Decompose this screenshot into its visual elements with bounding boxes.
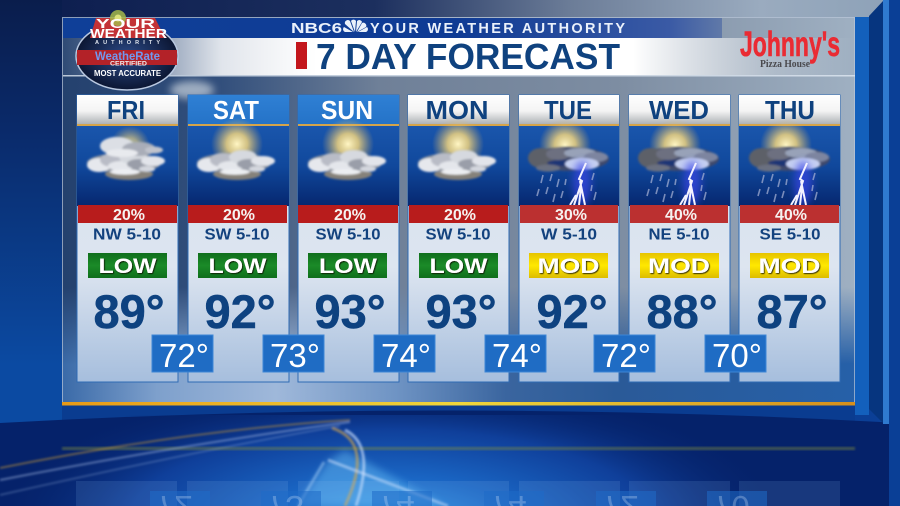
forecast card: Tuesday: W 5-10 — [541, 226, 597, 244]
low temperature: 72: 72° — [601, 337, 651, 374]
panel sky — [62, 17, 855, 403]
badge: Your Weather Authority WeatheRate — [76, 10, 178, 90]
low temperature: 74: 74° — [381, 337, 431, 374]
forecast card: Sunday: 93° — [314, 285, 386, 338]
header bar: NBC6 your weather authority: YOUR WEATHER AUTHORITY — [370, 21, 625, 37]
forecast card: Tuesday: 30% — [555, 207, 587, 224]
forecast card: Saturday: SAT — [213, 95, 259, 125]
forecast card: Monday — [408, 95, 509, 382]
forecast card: Wednesday: 40% — [665, 207, 697, 224]
badge: Your Weather Authority WeatheRate: WeatheRate — [95, 49, 160, 63]
forecast card: Wednesday — [629, 95, 730, 382]
forecast card: Tuesday: MOD — [538, 255, 600, 278]
forecast card: Monday: LOW — [430, 255, 488, 278]
forecast card: Monday: MON — [426, 95, 488, 125]
logo: Johnny's Pizza House: Johnny's — [740, 25, 840, 64]
logo: Johnny's Pizza House — [740, 25, 840, 70]
forecast card: Friday: FRI — [107, 95, 145, 125]
forecast card: Thursday: SE 5-10 — [760, 226, 820, 244]
forecast card: Friday: 89° — [93, 285, 165, 338]
forecast card: Tuesday — [519, 95, 619, 382]
gold base line — [62, 402, 855, 406]
forecast card: Sunday — [298, 95, 399, 382]
forecast card: Monday: SW 5-10 — [426, 226, 490, 244]
title: 7 DAY FORECAST — [316, 36, 620, 77]
forecast card: Saturday: 20% — [223, 207, 255, 224]
badge: Your Weather Authority WeatheRate: YOUR — [96, 16, 156, 31]
low temperature: 70: 70° — [712, 337, 762, 374]
forecast card: Tuesday: 92° — [536, 285, 608, 338]
forecast card: Saturday: 92° — [204, 285, 276, 338]
forecast card: Sunday: 20% — [334, 207, 366, 224]
logo: Johnny's Pizza House: Pizza House — [760, 59, 811, 70]
forecast card: Sunday: SUN — [321, 95, 373, 125]
low temperature: 73: 73° — [270, 337, 320, 374]
forecast card: Thursday: 87° — [756, 285, 828, 338]
forecast card: Monday: 93° — [425, 285, 497, 338]
forecast card: Saturday: SW 5-10 — [204, 226, 270, 244]
header bar: NBC6 your weather authority — [63, 18, 722, 38]
forecast card: Wednesday: WED — [649, 95, 709, 125]
forecast card: Friday: NW 5-10 — [93, 226, 161, 244]
forecast card: Wednesday: NE 5-10 — [648, 226, 710, 244]
cloud patch above the cards — [170, 81, 214, 99]
forecast card: Tuesday: TUE — [544, 95, 592, 125]
forecast card: Thursday: 40% — [775, 207, 807, 224]
badge: Your Weather Authority WeatheRate: WEATHER — [90, 26, 168, 41]
forecast card: Sunday: SW 5-10 — [316, 226, 380, 244]
forecast card: Friday: 20% — [113, 207, 145, 224]
forecast card: Thursday: MOD — [758, 255, 820, 278]
forecast card: Sunday: LOW — [319, 255, 377, 278]
title bar — [63, 36, 855, 77]
forecast card: Wednesday: 88° — [646, 285, 718, 338]
badge: Your Weather Authority WeatheRate: MOST ACCURATE — [94, 69, 162, 78]
forecast card: Thursday — [739, 95, 840, 382]
right side pillar — [855, 0, 900, 506]
red title marker — [296, 42, 307, 69]
forecast card: Wednesday: MOD — [648, 255, 710, 278]
forecast card: Saturday: LOW — [208, 255, 267, 278]
forecast card: Saturday — [188, 95, 289, 382]
forecast card: Thursday: THU — [765, 95, 815, 125]
low temperature: 74: 74° — [492, 337, 542, 374]
badge: Your Weather Authority WeatheRate: CERTIFIED — [110, 62, 148, 68]
forecast card: Monday: 20% — [444, 207, 476, 224]
icon: peacock logo — [343, 20, 368, 32]
forecast card: Friday: LOW — [98, 255, 157, 278]
low temperature: 72: 72° — [159, 337, 209, 374]
badge: Your Weather Authority WeatheRate: AUTHORITY — [95, 40, 160, 46]
reflection of the forecast cards — [76, 481, 840, 506]
forecast card: Friday — [77, 95, 178, 382]
header bar: NBC6 your weather authority: NBC6 — [291, 21, 342, 37]
